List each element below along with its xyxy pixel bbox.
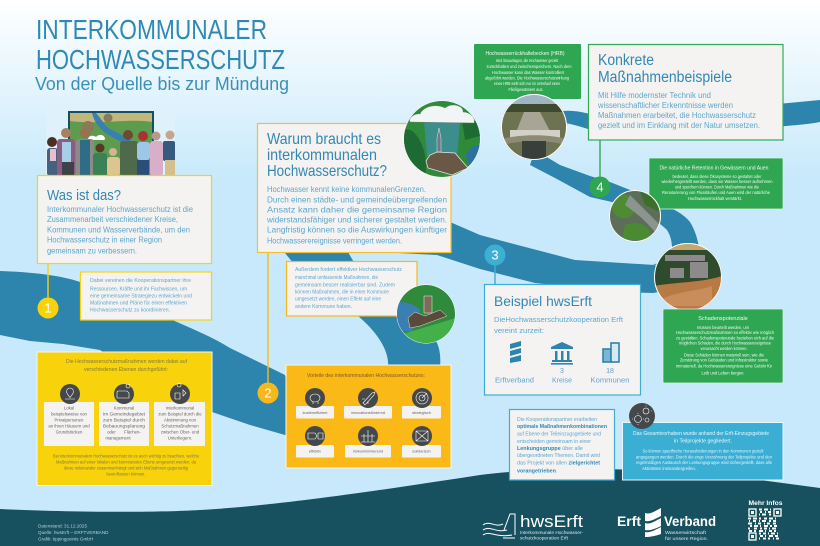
photo circle: floodplain xyxy=(609,190,661,242)
photo circle: retention basin xyxy=(501,94,567,160)
panel: konkrete massnahmen xyxy=(588,44,783,140)
card: interkommunal: Schutzmaßnahmen xyxy=(161,424,199,428)
card: kommunal: zum Beispiel durch xyxy=(103,418,146,422)
panel: kooperationspartner: Die Kooperationspartner erarbeiten xyxy=(517,417,597,423)
text: counts: Kommunen xyxy=(590,378,630,384)
panel: schadenspotenziale xyxy=(663,309,783,383)
panel: kooperationspartner: Lenkungsgruppe über alle xyxy=(517,446,583,452)
panel: ausserdem: gemeinsam besser realisierbar sind. Zudem xyxy=(295,282,395,288)
panel: schadenspotenziale: möglichen Schäden, die durch Hochwasserereignisse xyxy=(679,340,771,346)
panel: warum xyxy=(258,124,451,252)
footer band xyxy=(0,469,820,546)
text: counts: 3 xyxy=(560,368,564,375)
panel heading: ebenen: Die Hochwasserschutzmaßnahmen werden dabei auf xyxy=(66,359,187,365)
panel: vorteile xyxy=(286,365,451,468)
marker 2: 2 xyxy=(264,386,272,400)
logo: Erftverband: für unsere Region. xyxy=(665,536,708,541)
benefit: strategisch: strategisch xyxy=(412,410,431,415)
panel: was ist das: Hochwasserschutz in einer Region xyxy=(47,236,162,244)
panel: schadenspotenziale: zu gestalten. Schadenspotenziale beziehen sich auf die xyxy=(676,336,774,340)
footer source text: Grafik: tippingpoints GmbH xyxy=(38,536,93,542)
panel: warum: interkommunalen xyxy=(267,147,377,164)
benefit: innovationsfördernd: innovationsfördernd xyxy=(351,410,385,415)
footer source text xyxy=(38,524,109,542)
card: interkommunal: zum Beispiel durch die xyxy=(158,412,202,416)
panel: natuerliche retention: und speichern können. Durch Maßnahmen wie die xyxy=(675,184,759,190)
logo: hwsErft: hwsErft xyxy=(520,512,583,531)
title xyxy=(35,14,289,94)
benefit: innovationsfördernd xyxy=(344,388,392,418)
panel: gesamtvorhaben: So können spezifische Herausforderungen in den Kommunen gezielt xyxy=(642,448,764,454)
panel: warum: Durch einen städte- und gemeindeübergreifenden xyxy=(267,196,447,204)
panel: schadenspotenziale: Leib und Leben bergen. xyxy=(702,370,744,376)
panel: hochwasserrueckhaltebecken: zurückhalten und zwischenspeichern. Nach dem xyxy=(486,64,572,69)
card: lokal: Grundstücken xyxy=(56,430,83,434)
panel: ausserdem: umgesetzt werden, einen Effekt auf eine xyxy=(295,296,381,302)
panel: warum: Ansatz kann daher die gemeinsame Region xyxy=(267,206,447,214)
panel: schadenspotenziale: immateriell, da Hochwasserereignisse eine Gefahr für xyxy=(676,364,772,368)
marker 2 xyxy=(258,382,278,404)
panel: kooperationspartner: das Projekt von allen zielgerichtet xyxy=(517,460,600,466)
panel: kooperationspartner note: eine gemeinsame Strategiezu entwickeln und xyxy=(90,294,192,300)
panel: warum: Hochwasser kennt keine kommunalenGrenzen. xyxy=(267,185,426,194)
panel: schadenspotenziale: Hochwasserschutzmaßnahmen so effektiv wie möglich xyxy=(676,330,774,335)
panel: natuerliche retention: Die natürliche Retention in Gewässern und Auen xyxy=(660,166,768,172)
title: INTERKOMMUNALER xyxy=(36,14,267,45)
benefit: kosteneffizient: kosteneffizient xyxy=(303,410,328,415)
card: interkommunal xyxy=(154,383,205,446)
card: lokal: an ihren Häusern und xyxy=(48,424,90,428)
panel: gesamtvorhaben: regelmäßigen Austausch der Lenkungsgruppe wird sichergestellt, dass alle xyxy=(636,460,773,465)
icon: erftverband xyxy=(510,341,521,363)
panel: gesamtvorhaben: in Teilprojekte gegliedert. xyxy=(674,438,732,444)
panel: schadenspotenziale: Diese Schäden können materiell sein, wie die xyxy=(684,352,764,358)
panel: hochwasserrueckhaltebecken xyxy=(474,44,581,99)
logo: Erftverband: Erft xyxy=(617,513,641,529)
panel: ausserdem xyxy=(286,262,417,316)
panel: was ist das: Zusammenarbeit verschiedener Kreise, xyxy=(47,215,178,224)
card: interkommunal: Unterliegern. xyxy=(168,436,192,440)
text: ebenen hinweis xyxy=(53,454,199,476)
icon: kreise xyxy=(551,342,573,365)
panel: schadenspotenziale: Schadenspotenziale xyxy=(698,316,748,322)
panel: kooperationspartner: entscheiden gemeinsam in einer xyxy=(517,439,591,445)
benefit: risikominimierend xyxy=(345,426,391,458)
panel heading: ebenen xyxy=(66,359,187,373)
panel: kooperationspartner: vorangetrieben. xyxy=(517,468,557,474)
title: HOCHWASSERSCHUTZ xyxy=(36,44,285,75)
icon: gears xyxy=(629,403,655,429)
panel: gesamtvorhaben xyxy=(622,422,783,480)
marker 4 xyxy=(590,176,610,198)
panel: ausserdem: andere Kommune haben. xyxy=(295,304,352,310)
panel: hochwasserrueckhaltebecken: Hochwasser kann das Wasser kontrolliert xyxy=(492,70,565,75)
panel: beispiel hwsErft: vereint zurzeit: xyxy=(494,326,544,335)
footer source text: Quelle: hwsErft – ERFTVERBAND xyxy=(38,530,109,535)
panel: natuerliche retention: Renaturierung von Flussläufen und Auen wird der natürliche xyxy=(662,190,770,195)
panel: schadenspotenziale: müssen beurteilt werden, um xyxy=(697,325,749,330)
benefit: kosteneffizient xyxy=(296,388,334,418)
panel: konkrete massnahmen: gezielt und im Einklang mit der Natur umsetzen. xyxy=(598,121,760,130)
panel: hochwasserrueckhaltebecken: eines HRB wirkt sich nur im Unterlauf eines xyxy=(494,81,560,86)
panel: konkrete massnahmen: Mit Hilfe modernster Technik und xyxy=(598,91,711,100)
panel: gesamtvorhaben: Das Gesamtvorhaben wurde anhand der Erft-Einzugsgebiete xyxy=(633,431,769,437)
panel: konkrete massnahmen: Maßnahmenbeispiele xyxy=(598,69,732,86)
panel: beispiel hwsErft: DieHochwasserschutzkooperation Erft xyxy=(494,315,624,324)
card: lokal: Privatpersonen xyxy=(55,418,84,422)
card: lokal: Lokal xyxy=(64,406,74,410)
panel: beispiel hwsErft xyxy=(484,284,640,395)
text: counts: 18 xyxy=(606,368,614,375)
benefit: risikominimierend: risikominimierend xyxy=(353,448,383,454)
panel: kooperationspartner: übergeordneten Themen. Damit wird xyxy=(517,453,600,459)
panel: konkrete massnahmen: wissenschaftlicher Erkenntnisse werden xyxy=(597,101,733,110)
connector line 2 xyxy=(267,253,269,393)
panel: natuerliche retention: wiederhergestellt werden, dass sie Wasser besser aufnehmen xyxy=(662,179,773,184)
panel: ausserdem: Außerdem fordert effektiver Hochwasserschutz xyxy=(295,267,402,273)
panel: konkrete massnahmen: Maßnahmen erarbeitet, die Hochwasserschutz xyxy=(598,111,756,120)
panel: was ist das xyxy=(38,176,212,264)
logo: Erftverband xyxy=(617,508,716,541)
panel: kooperationspartner xyxy=(510,410,614,480)
panel: warum: widerstandsfähiger und sicherer gestaltet werden. xyxy=(266,216,447,224)
card: kommunal: im Gemeindegebiet xyxy=(103,412,146,416)
card: kommunal: Bebauungsplanung xyxy=(103,424,146,428)
card: kommunal: oder Flächen- xyxy=(107,430,141,434)
panel: vorteile: Vorteile des interkommunalen Hochwasserschutzes: xyxy=(307,373,425,379)
panel: was ist das: Kommunen und Wasserverbände, um den xyxy=(47,226,190,234)
panel: natuerliche retention: Hochwasserrückhalt verstärkt. xyxy=(688,196,742,201)
title: Von der Quelle bis zur Mündung xyxy=(35,74,289,94)
card: lokal xyxy=(44,384,94,446)
card: kommunal xyxy=(99,384,149,446)
panel: warum: Warum braucht es xyxy=(267,131,381,148)
illustration: people in front of map xyxy=(46,110,175,176)
benefit: strategisch xyxy=(402,388,441,418)
panel: warum: Hochwasserschutz? xyxy=(267,163,387,180)
text: counts xyxy=(495,368,630,384)
panel: ausserdem: können Maßnahmen, die in einer Kommune xyxy=(295,290,389,296)
panel: beispiel hwsErft: Beispiel hwsErft xyxy=(494,293,592,309)
panel: was ist das: gemeinsam zu verbessern. xyxy=(47,246,137,256)
panel: schadenspotenziale: verursacht werden können. xyxy=(700,346,748,351)
panel: gesamtvorhaben: angegangen werden. Durch die enge Verzahnung der Teilprojekte und den xyxy=(636,454,773,460)
panel: gesamtvorhaben: Aktivitäten ineinandergreifen. xyxy=(642,466,696,471)
QR code with caption xyxy=(748,501,783,540)
footer source text: Datenstand: 31.12.2025 xyxy=(38,524,87,528)
logo: hwsErft xyxy=(483,512,584,540)
text: ebenen hinweis: beeinflussen können. xyxy=(106,472,146,476)
panel: natuerliche retention: bedeutet, dass diese Ökosysteme so gestaltet oder xyxy=(672,173,762,179)
card: interkommunal: zwischen Ober- und xyxy=(161,430,200,434)
photo circle: castle illustration xyxy=(396,284,456,344)
marker 1 xyxy=(38,298,58,318)
panel: kooperationspartner note xyxy=(80,272,212,320)
text: ebenen hinweis: diese miteinander zusammenhängt und sich Maßnahmen gegenseitig xyxy=(64,466,188,470)
text: counts: Kreise xyxy=(552,378,572,384)
connector line 1 xyxy=(47,264,49,308)
benefit: effektiv xyxy=(296,426,334,458)
panel: kooperationspartner note: Hochwasserschutz zu koordinieren. xyxy=(90,308,170,314)
logo: hwsErft: schutzkooperation Erft xyxy=(520,536,569,540)
benefit: effektiv: effektiv xyxy=(309,448,321,454)
photo circle: flood damage xyxy=(654,243,722,312)
QR code with caption: Mehr Infos xyxy=(748,501,783,507)
panel: kooperationspartner: optimale Maßnahmenkombinationen xyxy=(517,424,607,430)
text: ebenen hinweis: Maßnahmen auf einer lokalen und kommunalen Ebene umgesetzt werden, da xyxy=(56,460,196,464)
panel: warum: Langfristig können so die Auswirkungen künftiger xyxy=(267,226,447,234)
card: interkommunal: Interkommunal xyxy=(166,406,194,410)
panel: warum: Hochwasserereignisse verringert werden. xyxy=(267,236,402,246)
marker 3 xyxy=(484,244,506,266)
panel: natuerliche retention xyxy=(649,158,783,209)
panel: was ist das: Was ist das? xyxy=(47,187,121,204)
logo: Erftverband: Verband xyxy=(664,513,716,529)
icon: kommunen xyxy=(603,343,619,362)
panel heading: ebenen: verschiedenen Ebenen durchgeführt: xyxy=(84,367,168,373)
text: ebenen hinweis: Bei interkommunalem Hochwasserschutz ist es auch wichtig zu beachten, welche xyxy=(53,454,199,458)
text: counts: Erftverband xyxy=(495,378,534,384)
panel: ebenen xyxy=(37,352,212,486)
benefit: solidarisch: solidarisch xyxy=(412,448,431,454)
panel: konkrete massnahmen: Konkrete xyxy=(598,52,654,69)
marker 1: 1 xyxy=(44,300,52,316)
panel: hochwasserrueckhaltebecken: Fließgewässers aus. xyxy=(508,87,544,92)
panel: hochwasserrueckhaltebecken: sind Stauanlagen, die Hochwasser gezielt xyxy=(496,58,559,63)
card: interkommunal: Abstimmung von xyxy=(164,418,197,422)
marker 3: 3 xyxy=(491,248,499,262)
logo: Erftverband: Wasserwirtschaft xyxy=(665,530,707,535)
panel: hochwasserrueckhaltebecken: abgeführt werden. Die Hochwasserschutzwirkung xyxy=(485,76,570,80)
benefit: solidarisch xyxy=(402,426,441,458)
card: kommunal: Kommunal xyxy=(114,406,134,410)
panel: was ist das: Interkommunaler Hochwasserschutz ist die xyxy=(47,205,194,214)
panel: kooperationspartner note: Ressourcen, Kräfte und ihr Fachwissen, um xyxy=(90,286,187,292)
river landscape xyxy=(0,100,820,440)
card: lokal: beispielsweise von xyxy=(51,412,88,416)
panel: hochwasserrueckhaltebecken: Hochwasserrückhaltebecken (HRB) xyxy=(486,51,565,57)
connector line 4 xyxy=(599,140,601,187)
panel: schadenspotenziale: Zerstörung von Gebäuden und Infrastruktur sowie xyxy=(680,358,768,362)
panel: kooperationspartner note: Maßnahmen und Pläne für einen effektiven xyxy=(90,300,187,306)
panel: ausserdem: manchmal umfassende Maßnahmen, die xyxy=(295,275,378,281)
connector line 3 xyxy=(494,255,496,284)
panel: kooperationspartner: auf Ebene der Teileinzugsgebiete und xyxy=(517,432,601,438)
card: kommunal: management xyxy=(105,436,131,440)
photo circle: flood illustration xyxy=(404,100,480,178)
panel: kooperationspartner note: Dabei vereinen die Kooperationspartner ihre xyxy=(90,278,191,284)
logo: hwsErft: Interkommunale Hochwasser- xyxy=(520,530,584,535)
marker 4: 4 xyxy=(596,180,604,194)
